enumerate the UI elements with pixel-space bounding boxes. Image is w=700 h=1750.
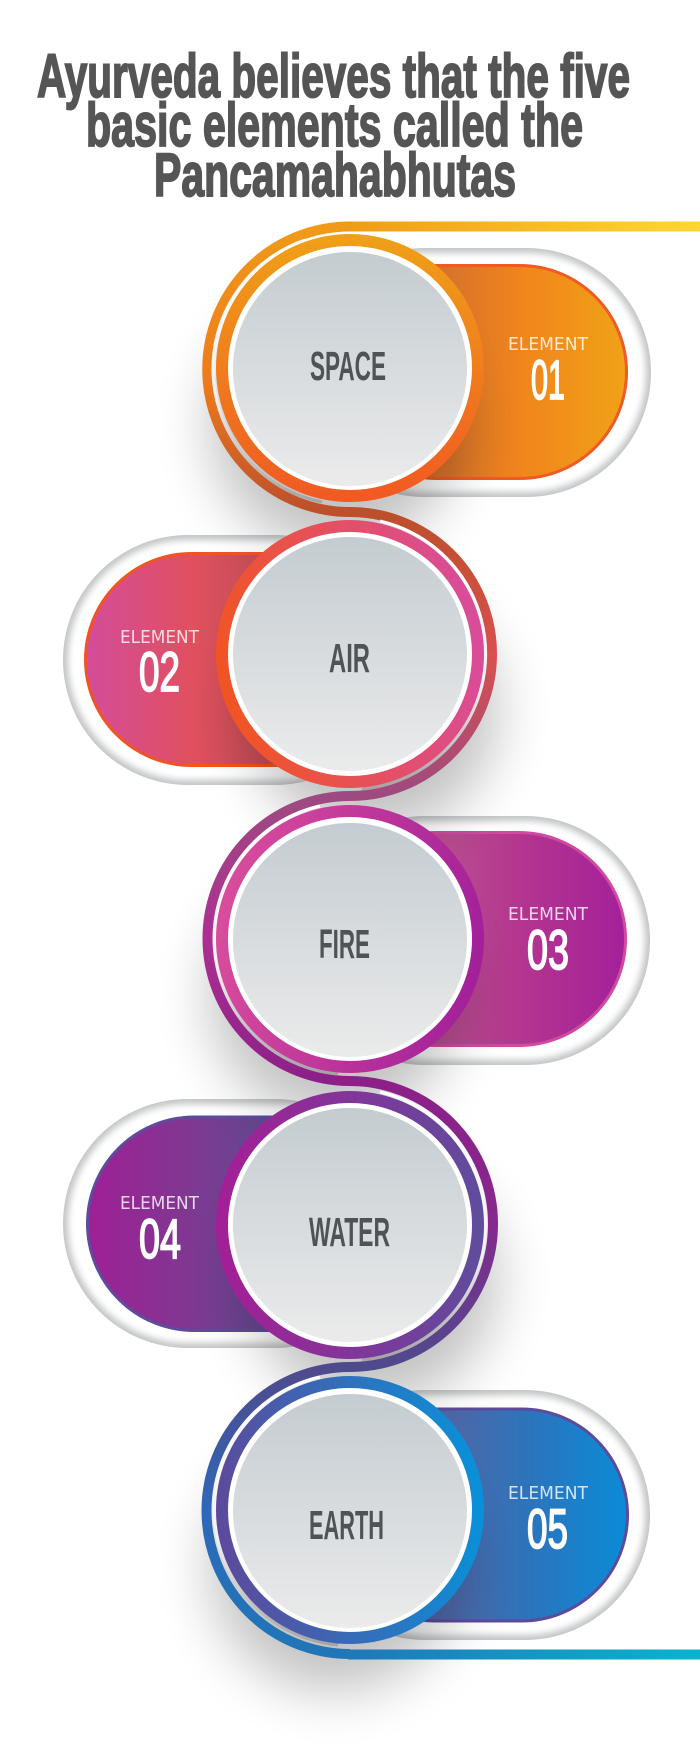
label: element 02: 02 <box>139 640 180 703</box>
circle: water: WATER <box>309 1209 390 1255</box>
title <box>37 42 630 209</box>
circle: water <box>222 1097 478 1353</box>
label: element 05 <box>508 1484 588 1560</box>
label: element 01: ELEMENT <box>508 335 588 355</box>
label: element 01: 01 <box>531 348 565 411</box>
circle: space: SPACE <box>310 343 386 389</box>
pill: element 04 <box>63 1099 299 1348</box>
circle: fire <box>222 811 478 1067</box>
label: element 02 <box>120 628 199 703</box>
connecting ribbon <box>207 226 700 1654</box>
label: element 04: ELEMENT <box>120 1194 199 1214</box>
title: Pancamahabhutas <box>154 141 516 209</box>
label: element 04: 04 <box>139 1207 181 1270</box>
label: element 03 <box>508 905 588 981</box>
label: element 02: ELEMENT <box>120 628 199 648</box>
circle: earth: EARTH <box>309 1502 384 1548</box>
label: element 03: 03 <box>527 918 569 981</box>
ribbon inner shading <box>213 240 486 1645</box>
circle: space <box>222 240 478 496</box>
pill: element 05 <box>395 1390 650 1640</box>
circle: fire: FIRE <box>319 921 370 967</box>
circle: earth <box>222 1382 478 1638</box>
pill: element 03 <box>401 816 650 1065</box>
label: element 04 <box>120 1194 199 1270</box>
circle: air <box>222 526 478 782</box>
circle drop shadows <box>210 300 497 1691</box>
pill: element 01 <box>396 248 651 497</box>
label: element 01 <box>508 335 588 411</box>
label: element 05: ELEMENT <box>508 1484 588 1504</box>
label: element 05: 05 <box>527 1497 568 1560</box>
pill: element 02 <box>63 535 306 785</box>
circle: air: AIR <box>329 635 370 681</box>
label: element 03: ELEMENT <box>508 905 588 925</box>
